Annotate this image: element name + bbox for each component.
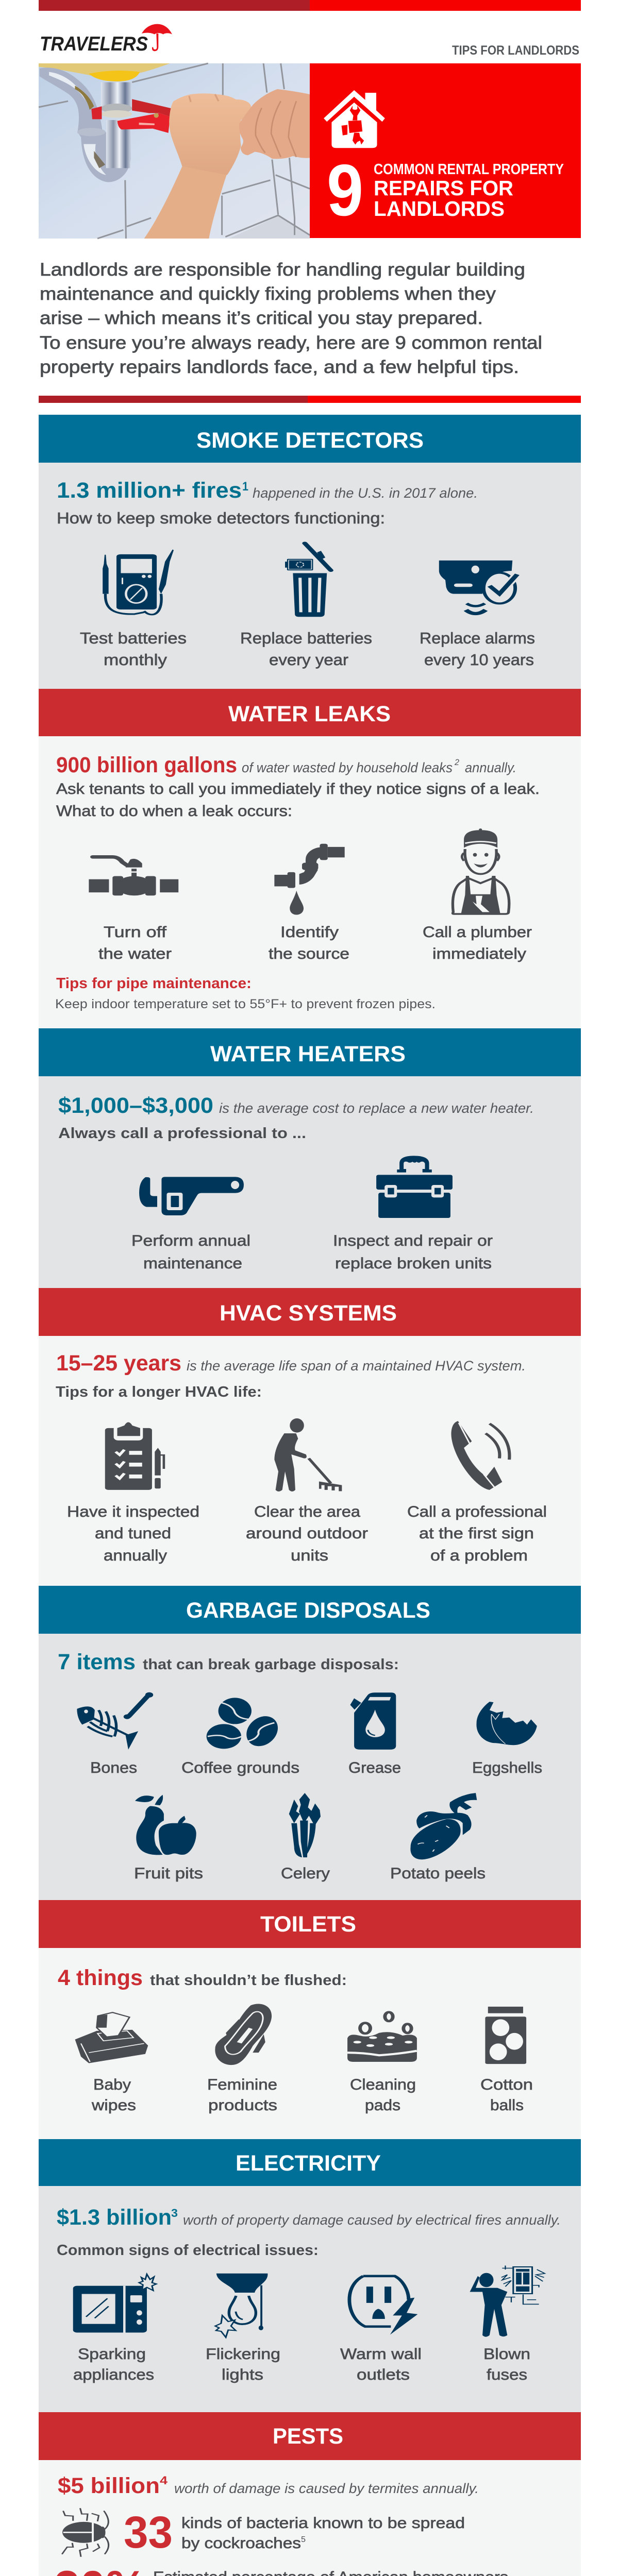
labels: items not to flush <box>91 2076 533 2114</box>
stat: 33 kinds of bacteria: 33 <box>124 2507 173 2557</box>
labels: first row items <box>90 1759 542 1776</box>
icon: pipe wrench <box>139 1177 244 1215</box>
heading: electricity <box>39 2139 581 2186</box>
labels: items not to flush: pads <box>365 2097 400 2114</box>
stat: 1.3 million+ fires: happened in the U.S. in 2017 alone. <box>253 485 478 501</box>
intro paragraph: maintenance and quickly fixing problems when they <box>40 284 496 304</box>
intro paragraph <box>40 260 542 377</box>
labels: HVAC tips: annually <box>104 1547 167 1564</box>
stat: $5 billion: $5 billion <box>58 2473 160 2498</box>
stat: 33 kinds of bacteria: 5 <box>301 2535 306 2544</box>
intro paragraph: property repairs landlords face, and a few helpful tips. <box>40 357 519 377</box>
labels: smoke detector tips <box>80 629 535 669</box>
labels: second row items: Celery <box>281 1865 330 1882</box>
labels: water heater tasks: Inspect and repair or <box>333 1232 493 1249</box>
hero photo: hands tightening a pipe with a wrench <box>39 63 310 239</box>
labels: leak steps: Call a plumber <box>423 924 532 941</box>
stat: HVAC life span: is the average life span of a maintained HVAC system. <box>187 1358 526 1374</box>
stat: 30% rodent problem <box>54 2561 508 2576</box>
labels: second row items: Potato peels <box>390 1865 486 1882</box>
icon: toolbox <box>376 1156 453 1218</box>
subheading: Always call a professional to ... <box>58 1125 306 1142</box>
labels: HVAC tips: Clear the area <box>254 1503 360 1520</box>
labels: items not to flush: Baby <box>93 2076 131 2093</box>
intro paragraph: arise – which means it’s critical you stay prepared. <box>40 308 483 328</box>
icon: fish bones <box>77 1692 153 1750</box>
icon: house with wrench and fist <box>324 90 385 148</box>
labels: leak steps: the water <box>98 945 172 962</box>
stat: $1.3 billion: 3 <box>171 2207 178 2219</box>
labels: smoke detector tips: monthly <box>104 651 168 669</box>
labels: leak steps: immediately <box>432 945 526 962</box>
stat: 900 billion gallons: 2 <box>454 757 460 767</box>
labels: signs of electrical issues: Sparking <box>78 2346 146 2363</box>
stat: 900 billion gallons: of water wasted by household leaks <box>242 760 453 775</box>
stat: 900 billion gallons: annually. <box>465 760 516 775</box>
stat: replacement cost: is the average cost to replace a new water heater. <box>219 1100 534 1116</box>
text: pipe maintenance tip: Keep indoor temperature set to 55°F+ to prevent frozen pipes. <box>55 997 436 1011</box>
labels: smoke detector tips: Replace alarms <box>420 629 535 647</box>
stat: 7 items <box>58 1650 399 1674</box>
subheading: Common signs of electrical issues: <box>57 2242 319 2259</box>
stat: 4 things <box>58 1965 347 1990</box>
icon: grease container <box>350 1692 396 1750</box>
stat: 1.3 million+ fires <box>57 478 478 503</box>
labels: items not to flush: wipes <box>91 2097 136 2114</box>
logo: Travelers: TRAVELERS <box>40 33 148 55</box>
labels: items not to flush: Cotton <box>480 2076 533 2093</box>
stat: replacement cost: $1,000–$3,000 <box>58 1093 213 1118</box>
icon: coffee beans <box>207 1698 282 1749</box>
heading: toilets: TOILETS <box>260 1912 356 1937</box>
icon: baby wipes <box>75 2012 148 2063</box>
stat: HVAC life span <box>56 1351 526 1376</box>
panel: toilets <box>39 1900 581 2139</box>
labels: signs of electrical issues: outlets <box>357 2366 410 2383</box>
stat: 1.3 million+ fires: 1.3 million+ fires <box>57 478 242 503</box>
labels: signs of electrical issues: Warm wall <box>340 2346 422 2363</box>
labels: leak steps: the source <box>269 945 349 962</box>
heading: HVAC systems: HVAC SYSTEMS <box>220 1301 397 1326</box>
labels: signs of electrical issues: lights <box>222 2366 263 2383</box>
heading: pests <box>39 2412 581 2460</box>
logo: Travelers <box>40 24 172 55</box>
hero title text: COMMON RENTAL PROPERTY <box>374 161 564 178</box>
stat: 7 items: that can break garbage disposals: <box>143 1656 399 1673</box>
stat: 33 kinds of bacteria: kinds of bacteria known to be spread <box>181 2515 465 2532</box>
text: leak instructions: Ask tenants to call you immediately if they notice signs of a leak. <box>56 781 540 798</box>
labels: smoke detector tips: Replace batteries <box>240 629 372 647</box>
icon: feminine pad <box>215 2004 272 2065</box>
stat: 33 kinds of bacteria: by cockroaches <box>181 2535 301 2552</box>
stat: $5 billion <box>58 2473 479 2498</box>
icon: jar of cotton balls <box>485 2007 526 2064</box>
icon: flickering light bulb <box>215 2274 267 2337</box>
labels: HVAC tips: at the first sign <box>419 1525 534 1542</box>
stat: $1.3 billion: worth of property damage caused by electrical fires annually. <box>183 2212 561 2228</box>
heading: HVAC systems <box>39 1288 581 1336</box>
labels: signs of electrical issues: fuses <box>487 2366 527 2383</box>
labels: water heater tasks: maintenance <box>143 1255 242 1272</box>
top color band <box>39 0 581 11</box>
panel: water leaks <box>39 689 581 1028</box>
labels: water heater tasks: replace broken units <box>335 1255 492 1272</box>
icon: battery going into a trash can <box>285 543 331 617</box>
icon: shut-off valve <box>89 857 178 895</box>
labels: smoke detector tips: Test batteries <box>80 629 187 647</box>
subheading: How to keep smoke detectors functioning: <box>57 509 385 527</box>
heading: water heaters <box>39 1028 581 1076</box>
heading: pests: PESTS <box>273 2424 343 2449</box>
panel: pests <box>39 2412 581 2576</box>
icon: multimeter <box>103 550 174 615</box>
labels: water heater tasks: Perform annual <box>131 1232 250 1249</box>
labels: second row items: Fruit pits <box>134 1865 203 1882</box>
labels: HVAC tips: Have it inspected <box>67 1503 199 1520</box>
stat: $5 billion: worth of damage is caused by termites annually. <box>174 2481 479 2496</box>
labels: items not to flush: balls <box>490 2097 524 2114</box>
panel: water heaters <box>39 1028 581 1288</box>
labels: HVAC tips: of a problem <box>430 1547 528 1564</box>
intro paragraph: To ensure you’re always ready, here are 9 common rental <box>40 333 542 353</box>
labels: signs of electrical issues: appliances <box>73 2366 154 2383</box>
labels: HVAC tips: and tuned <box>95 1525 171 1542</box>
icon: plumber <box>453 828 509 914</box>
heading: toilets <box>39 1900 581 1948</box>
text: pipe maintenance tip <box>55 975 436 1011</box>
heading: garbage disposals: GARBAGE DISPOSALS <box>186 1598 430 1623</box>
stat: 900 billion gallons <box>56 753 516 777</box>
labels: HVAC tips: Call a professional <box>407 1503 547 1520</box>
icon: leaking pipe <box>274 844 345 915</box>
intro paragraph: Landlords are responsible for handling regular building <box>40 260 525 280</box>
heading: smoke detectors: SMOKE DETECTORS <box>196 428 424 453</box>
labels: items not to flush: Feminine <box>207 2076 277 2093</box>
icon: celery <box>289 1793 321 1857</box>
stat: $5 billion: 4 <box>160 2474 168 2487</box>
labels: HVAC tips: units <box>291 1547 328 1564</box>
hero title text: LANDLORDS <box>374 197 505 221</box>
labels: first row items: Eggshells <box>472 1759 542 1776</box>
icon: cockroach <box>62 2508 109 2557</box>
stat: HVAC life span: 15–25 years <box>56 1351 181 1376</box>
icon: person raking <box>274 1418 342 1492</box>
labels: signs of electrical issues <box>73 2346 530 2383</box>
labels: first row items: Grease <box>348 1759 401 1776</box>
hero red title panel <box>310 63 581 238</box>
labels: smoke detector tips: every year <box>269 651 348 669</box>
labels: signs of electrical issues: Blown <box>483 2346 530 2363</box>
icon: potato and peel <box>410 1793 477 1859</box>
labels: items not to flush: products <box>208 2097 277 2114</box>
text: pipe maintenance tip: Tips for pipe maintenance: <box>56 975 252 992</box>
icon: pear and apple <box>135 1795 196 1855</box>
stat: $1.3 billion: $1.3 billion <box>57 2205 172 2230</box>
stat: 900 billion gallons: 900 billion gallons <box>56 753 237 777</box>
panel: garbage disposals <box>39 1586 581 1900</box>
heading: water leaks: WATER LEAKS <box>228 702 391 726</box>
icon: smoke alarm with check mark <box>439 561 517 614</box>
heading: smoke detectors <box>39 415 581 463</box>
divider band <box>39 396 581 403</box>
icon: ringing phone <box>451 1421 509 1490</box>
big number 9: 9 <box>327 149 363 231</box>
labels: first row items: Coffee grounds <box>181 1759 299 1776</box>
panel: electricity <box>39 2139 581 2412</box>
heading: water leaks <box>39 689 581 736</box>
labels: leak steps: Turn off <box>104 924 167 941</box>
labels: items not to flush: Cleaning <box>350 2076 416 2093</box>
text: leak instructions: What to do when a leak occurs: <box>56 803 292 820</box>
stat: 33 kinds of bacteria <box>124 2507 465 2557</box>
labels: leak steps: Identify <box>280 924 339 941</box>
labels: first row items: Bones <box>90 1759 137 1776</box>
stat: $1.3 billion <box>57 2205 561 2230</box>
tagline: tips for landlords: TIPS FOR LANDLORDS <box>452 43 579 58</box>
icon: eggshells <box>476 1702 537 1745</box>
icon: sparking microwave <box>73 2274 156 2333</box>
heading: electricity: ELECTRICITY <box>236 2151 381 2176</box>
panel: smoke detectors <box>39 415 581 689</box>
labels: HVAC tips: around outdoor <box>246 1525 368 1542</box>
labels: signs of electrical issues: Flickering <box>206 2346 280 2363</box>
hero title text: REPAIRS FOR <box>374 176 513 200</box>
labels: smoke detector tips: every 10 years <box>424 651 534 669</box>
stat: 4 things: 4 things <box>58 1965 143 1990</box>
hero title text <box>374 161 564 221</box>
stat: 1.3 million+ fires: 1 <box>242 480 248 494</box>
panel: HVAC systems <box>39 1288 581 1586</box>
icon: cleaning sponge with bubbles <box>347 2012 417 2062</box>
icon: person at blown fuse box <box>470 2265 545 2337</box>
labels: water heater tasks <box>131 1232 493 1272</box>
labels: second row items <box>134 1865 486 1882</box>
stat: 7 items: 7 items <box>58 1650 136 1674</box>
heading: garbage disposals <box>39 1586 581 1634</box>
stat: replacement cost <box>58 1093 534 1118</box>
labels: leak steps <box>98 924 532 962</box>
labels: HVAC tips <box>67 1503 547 1564</box>
stat: 4 things: that shouldn’t be flushed: <box>150 1972 347 1989</box>
subheading: Tips for a longer HVAC life: <box>56 1384 262 1400</box>
icon: clipboard and pen <box>105 1422 165 1490</box>
heading: water heaters: WATER HEATERS <box>210 1042 406 1066</box>
text: leak instructions <box>56 781 540 820</box>
icon: warm outlet <box>349 2276 417 2335</box>
